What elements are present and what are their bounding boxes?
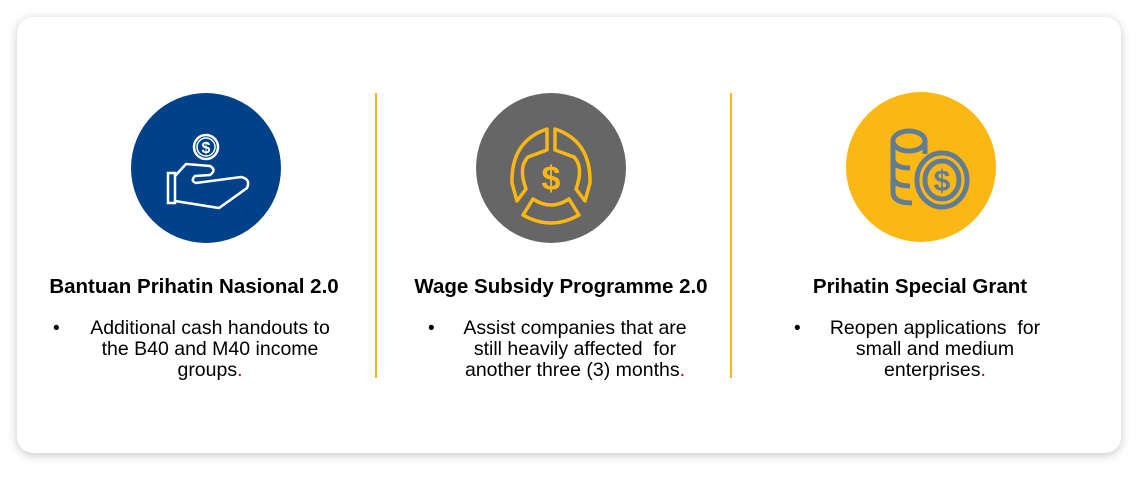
text 2: Assist companies that are: [463, 317, 687, 339]
text 3: enterprises.: [884, 359, 986, 381]
text 2: [463, 317, 687, 381]
heading 3: Prihatin Special Grant: [813, 275, 1027, 298]
icon: wage dial: $: [542, 160, 561, 198]
icon: hand with coin: $: [202, 140, 211, 157]
icon: wage dial: [476, 93, 626, 243]
text 1: the B40 and M40 income: [102, 338, 318, 360]
text 3: [830, 317, 1040, 381]
icon: hand with coin: [131, 93, 281, 243]
text 2: another three (3) months.: [465, 359, 685, 381]
text 1: [90, 317, 330, 381]
heading 2: Wage Subsidy Programme 2.0: [414, 275, 708, 298]
text 1: Additional cash handouts to: [90, 317, 330, 339]
icon: coins: [846, 92, 996, 242]
bullet 3: •: [794, 318, 801, 339]
heading 1: Bantuan Prihatin Nasional 2.0: [49, 275, 339, 298]
bullet 1: •: [53, 318, 60, 339]
icon: coins: $: [934, 165, 951, 198]
text 1: groups.: [177, 359, 243, 381]
text 2: still heavily affected for: [474, 338, 676, 360]
bullet 2: •: [428, 318, 435, 339]
text 3: Reopen applications for: [830, 317, 1040, 339]
text 3: small and medium: [856, 338, 1014, 360]
